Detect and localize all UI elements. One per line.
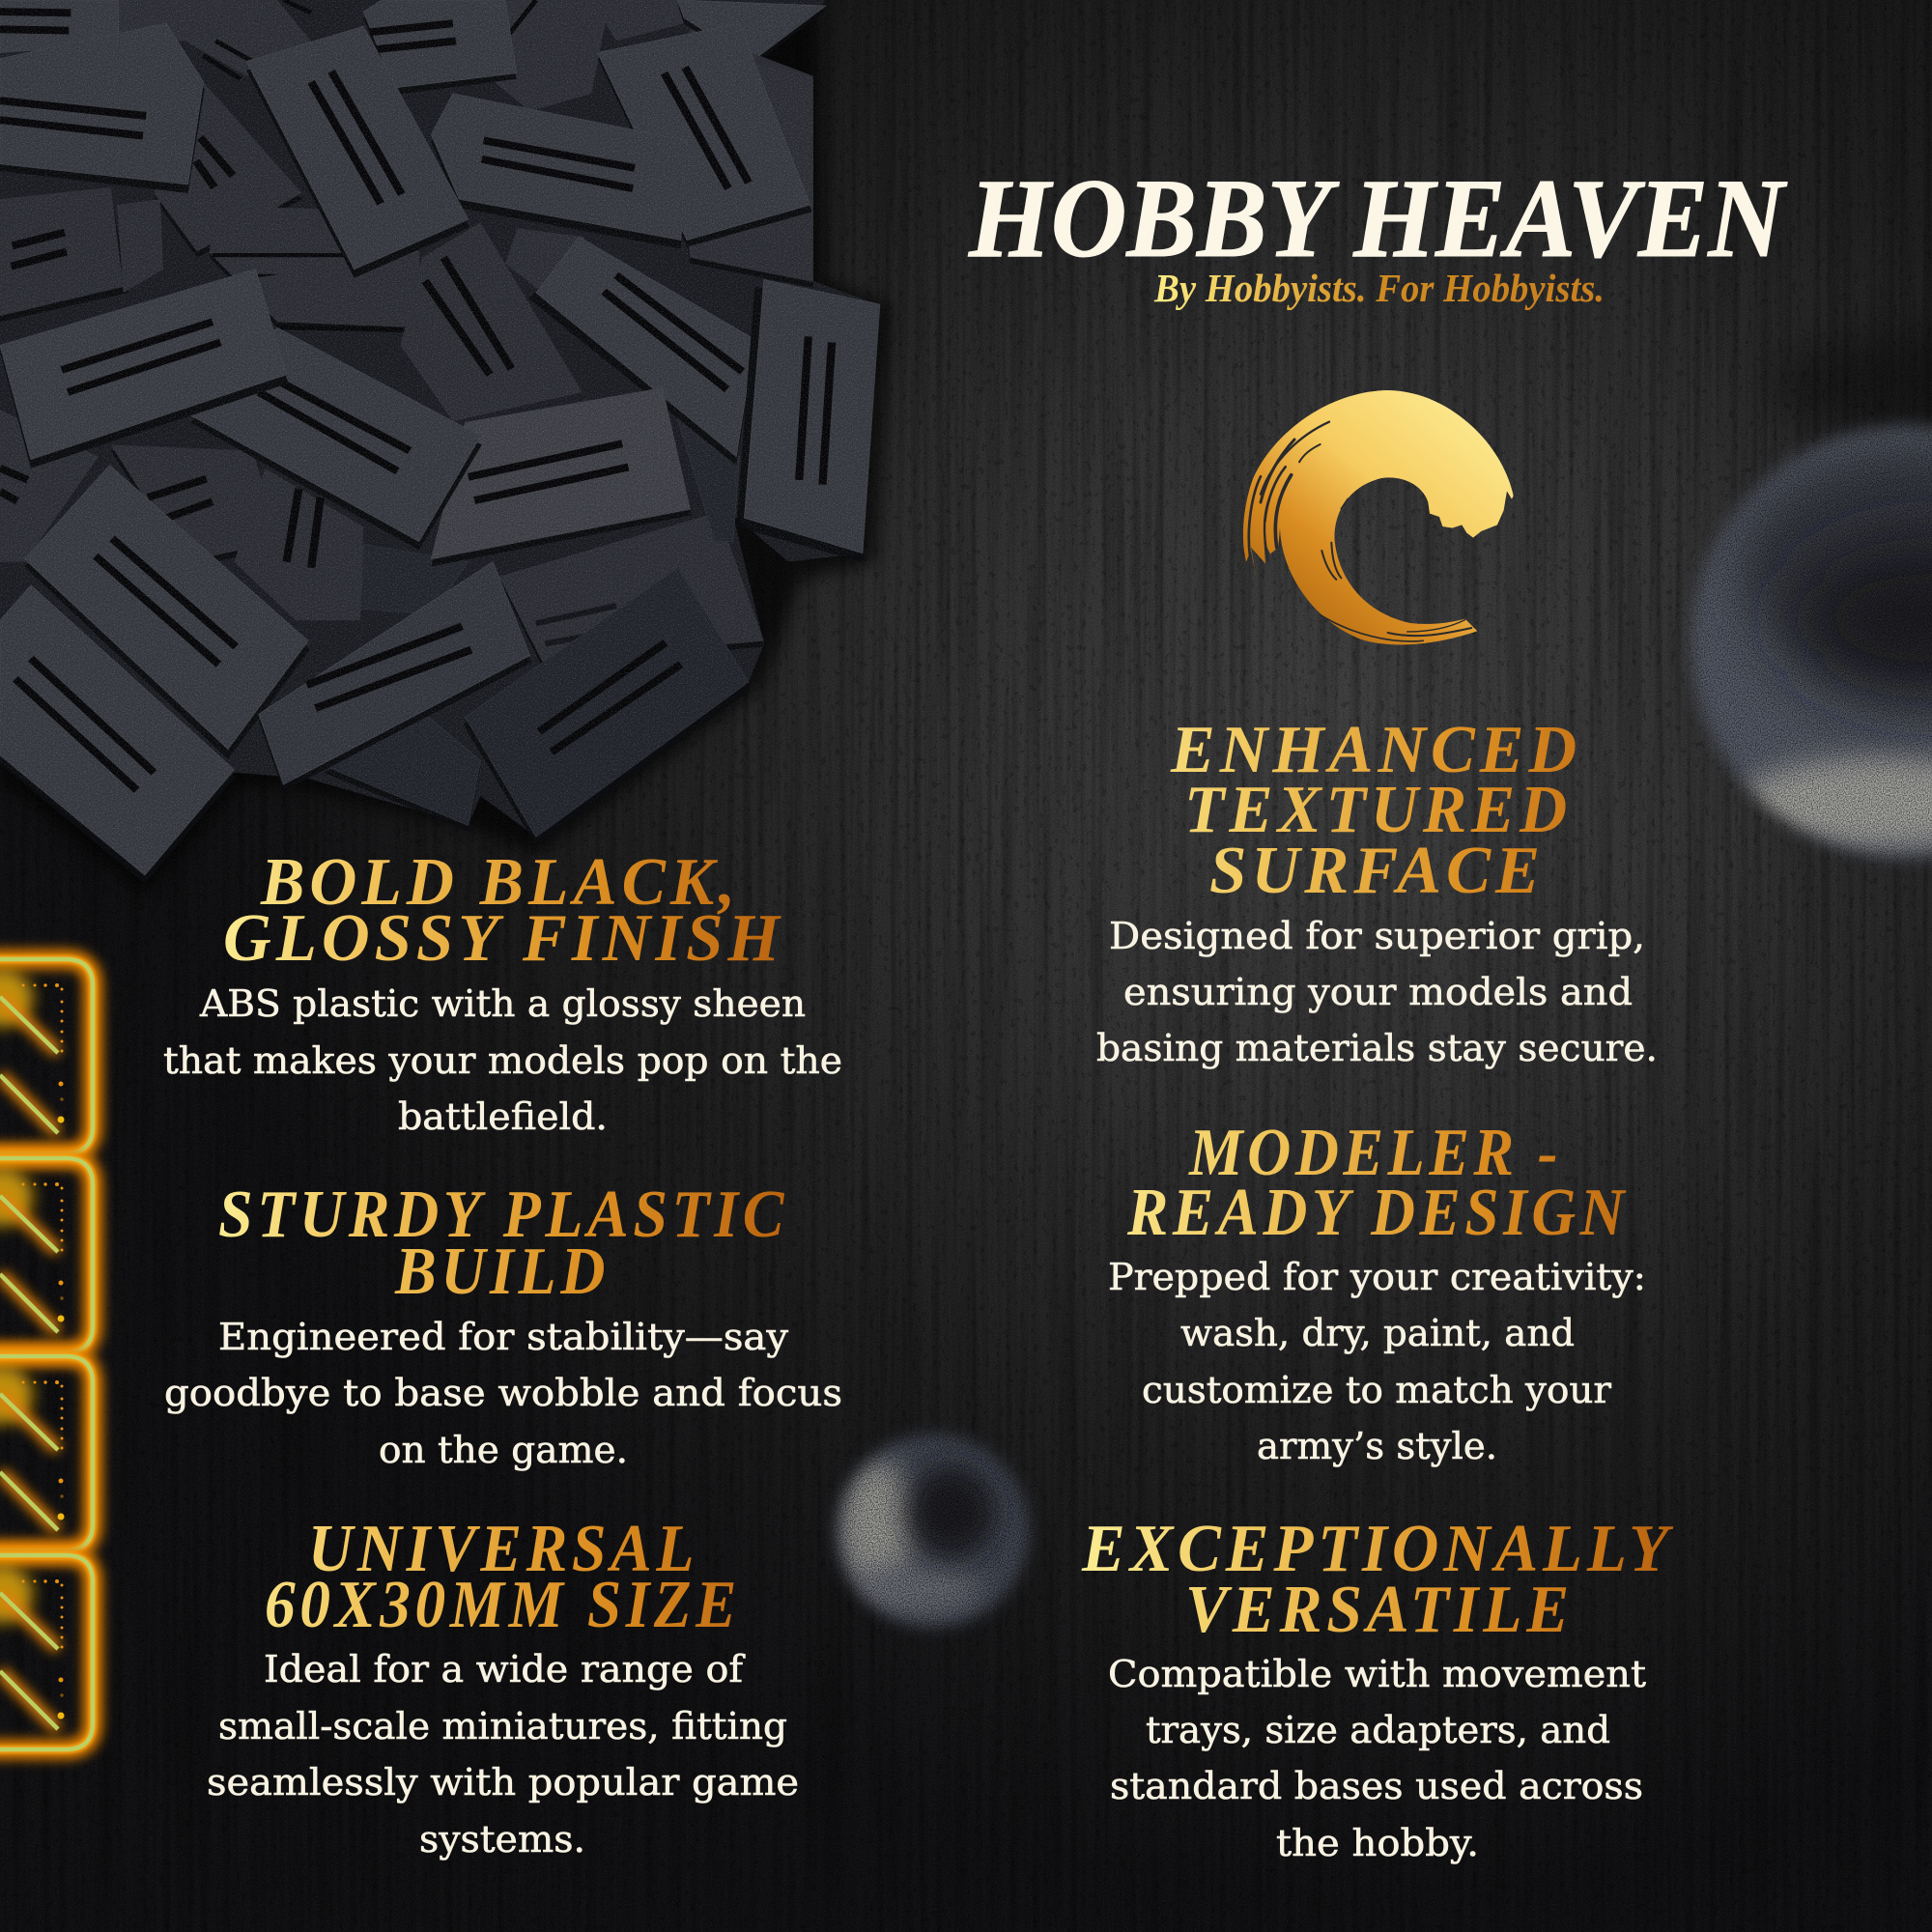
body text: battlefield.	[398, 1095, 608, 1138]
body text	[1108, 1256, 1646, 1467]
body text: wash, dry, paint, and	[1180, 1312, 1575, 1354]
base: lower centre	[259, 562, 531, 791]
body text: Designed for superior grip,	[1109, 915, 1645, 957]
heading	[1081, 1512, 1674, 1647]
heading: READY DESIGN	[1126, 1176, 1629, 1250]
heading: EXCEPTIONALLY	[1081, 1512, 1674, 1586]
body text: army’s style.	[1257, 1425, 1497, 1467]
back layer of bases	[0, 0, 826, 831]
heading: VERSATILE	[1185, 1573, 1574, 1647]
subtitle: By Hobbyists. For Hobbyists.	[1153, 266, 1605, 310]
body text	[1096, 915, 1658, 1069]
body text: customize to match your	[1142, 1369, 1612, 1411]
body text: systems.	[419, 1818, 585, 1861]
base: lower left front	[0, 585, 236, 884]
body text	[207, 1648, 799, 1861]
body text: the hobby.	[1276, 1822, 1479, 1864]
body text: Engineered for stability—say	[218, 1316, 789, 1358]
base: upper centre horizontal	[431, 94, 687, 249]
sphere: blurred right bubble	[1684, 416, 1932, 867]
body text: basing materials stay secure.	[1096, 1027, 1658, 1069]
base: top centre diagonal	[246, 26, 469, 278]
base: front darkest	[464, 568, 751, 846]
feature: enhanced textured surface	[1096, 713, 1658, 1069]
feature: bold black glossy finish	[163, 845, 842, 1138]
body text	[163, 982, 842, 1138]
body text: trays, size adapters, and	[1146, 1709, 1610, 1751]
base: lower left large	[25, 466, 310, 759]
base: middle left	[0, 270, 288, 469]
body text	[1108, 1653, 1646, 1864]
heading	[265, 1512, 741, 1642]
body text: ensuring your models and	[1123, 971, 1633, 1013]
heading	[223, 845, 784, 976]
base: grainy middle right	[431, 388, 692, 567]
heading	[1170, 713, 1581, 908]
feature: sturdy plastic build	[164, 1178, 842, 1471]
feature: exceptionally versatile	[1081, 1512, 1674, 1864]
base: upper left	[0, 23, 205, 193]
heading	[1126, 1116, 1629, 1250]
body text: that makes your models pop on the	[163, 1039, 842, 1082]
heading: SURFACE	[1209, 834, 1545, 908]
heading: GLOSSY FINISH	[223, 901, 784, 976]
heading: ENHANCED	[1170, 713, 1581, 787]
heading	[218, 1178, 788, 1309]
heading: BOLD BLACK,	[260, 845, 740, 920]
heading: UNIVERSAL	[308, 1512, 698, 1586]
feature: modeler-ready design	[1108, 1116, 1646, 1467]
body text: Ideal for a wide range of	[264, 1648, 746, 1690]
body text: on the game.	[379, 1429, 628, 1471]
body text: ABS plastic with a glossy sheen	[199, 982, 806, 1025]
heading: MODELER -	[1188, 1116, 1562, 1190]
heading: 60X30MM SIZE	[265, 1568, 741, 1642]
base: far right upright	[736, 280, 880, 562]
heading: STURDY PLASTIC	[218, 1178, 788, 1252]
feature: universal 60x30mm size	[207, 1512, 799, 1861]
body text: goodbye to base wobble and focus	[164, 1372, 842, 1414]
body text	[164, 1316, 842, 1471]
body text: small-scale miniatures, fitting	[218, 1705, 787, 1747]
icon: gold brush enso wave logo	[1243, 390, 1514, 644]
body text: Compatible with movement	[1108, 1653, 1646, 1695]
base: middle diagonal	[191, 327, 482, 551]
title: HOBBY HEAVEN	[968, 156, 1787, 281]
base: upper right	[598, 23, 812, 247]
body text: standard bases used across	[1110, 1765, 1643, 1807]
sphere: blurred small bubble	[827, 1426, 1037, 1636]
body text: Prepped for your creativity:	[1108, 1256, 1646, 1298]
base: right diagonal	[528, 237, 754, 466]
heading: BUILD	[394, 1235, 610, 1309]
heading: TEXTURED	[1184, 773, 1572, 847]
body text: seamlessly with popular game	[207, 1761, 799, 1804]
image: pile of black slotted miniature bases	[0, 0, 891, 895]
decoration: neon gold frames on left edge	[0, 959, 93, 1749]
